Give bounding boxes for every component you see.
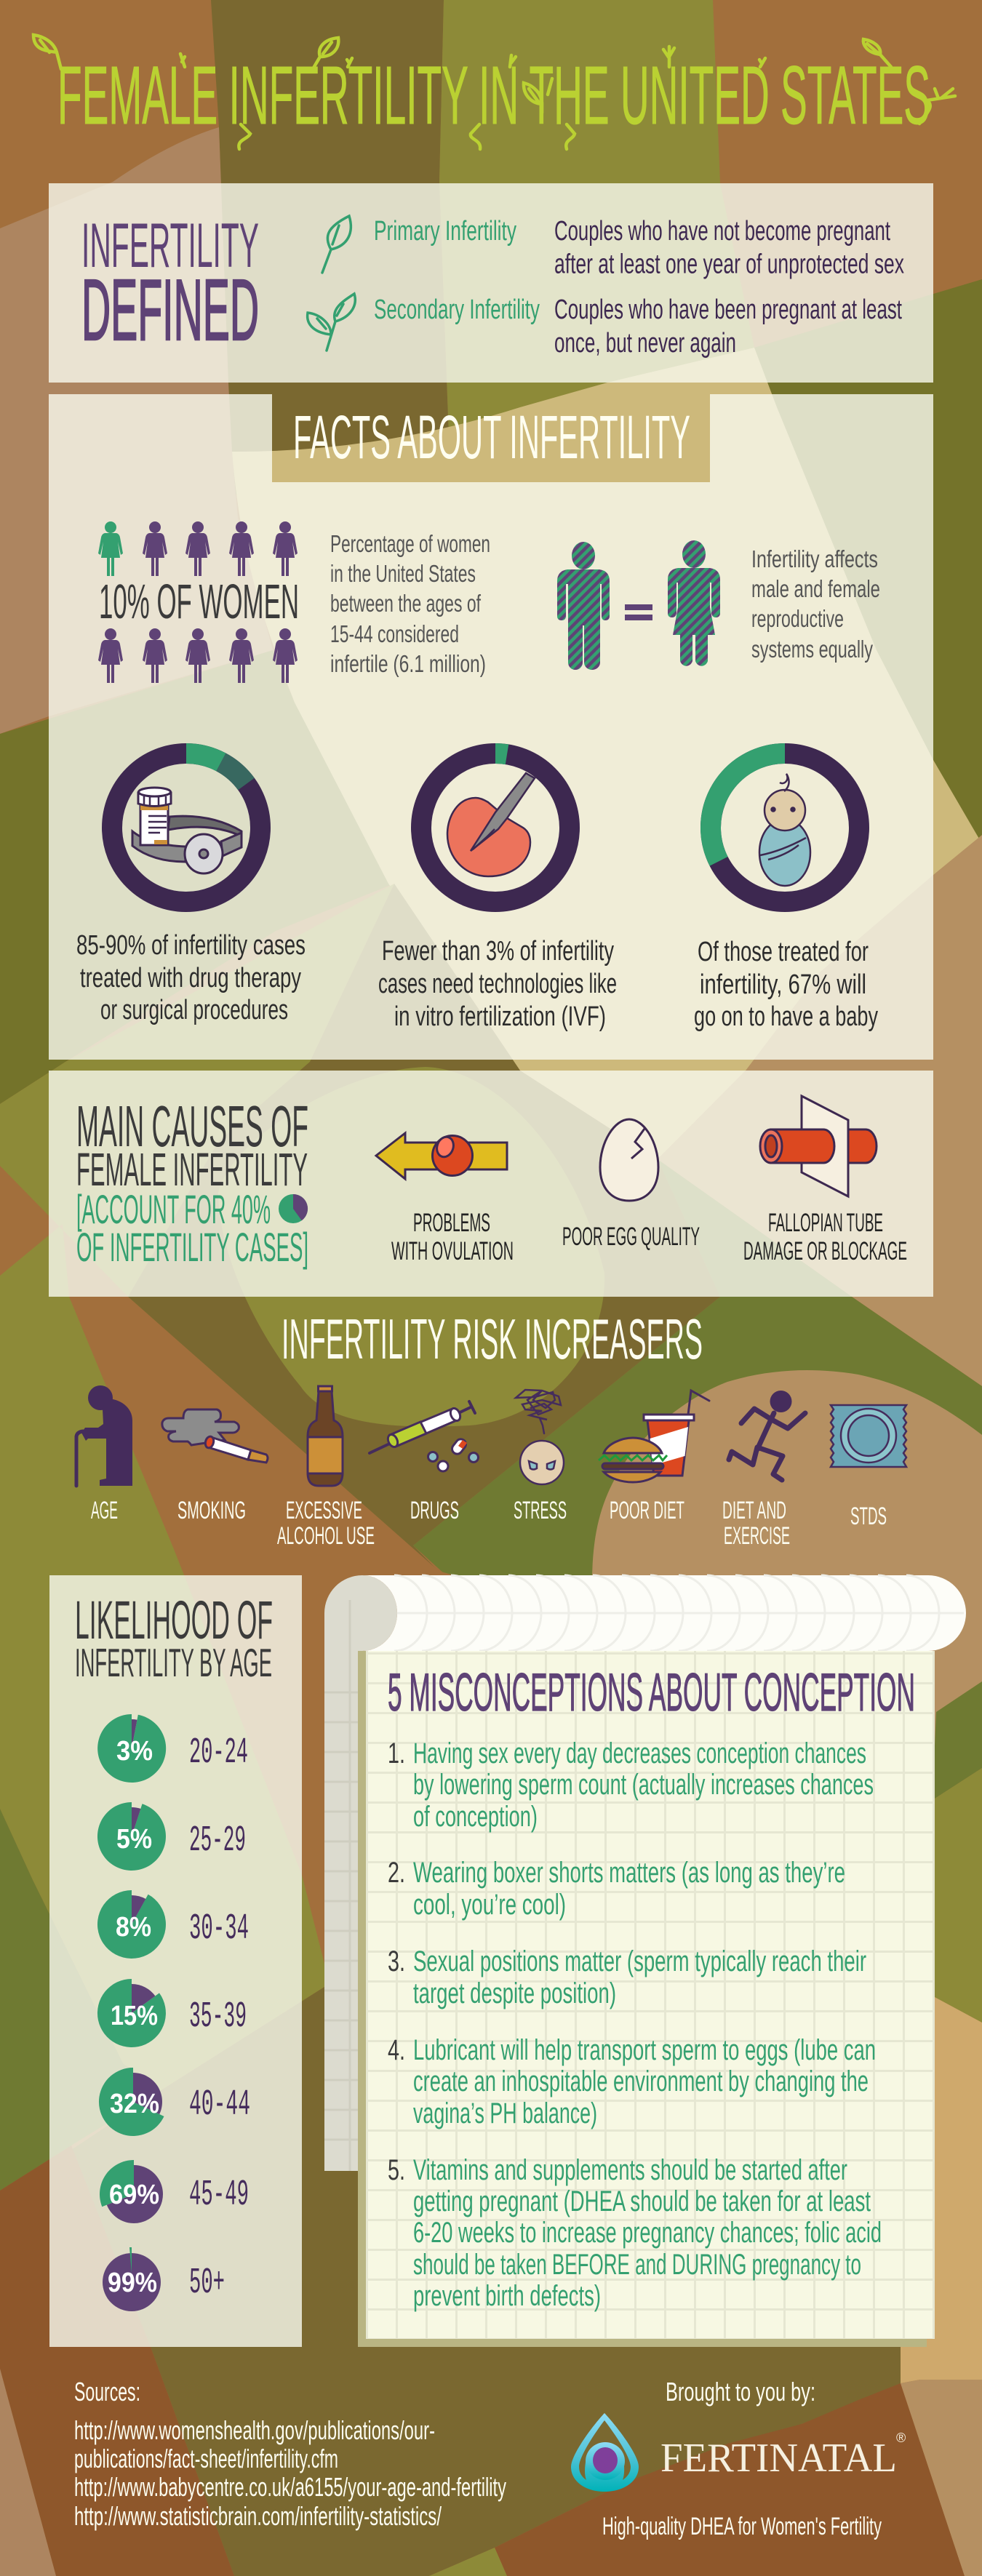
caption: have a baby: go on to have a baby: [694, 1001, 878, 1032]
panel: facts about infertility: [49, 394, 933, 1060]
text: percentage of women: 15-44 considered: [330, 620, 459, 647]
text: affects both sexes: Infertility affects: [751, 545, 878, 572]
icon: condom packet: [831, 1405, 906, 1467]
pie chart: 40 percent: [279, 1194, 308, 1223]
notepad page shadow: [358, 1651, 927, 2347]
icon: equals sign: [625, 604, 652, 620]
caption: drug therapy: or surgical procedures: [100, 995, 288, 1025]
label: diet and exercise: DIET AND: [722, 1497, 786, 1524]
icon: swaddled baby: [759, 774, 810, 886]
caption: have a baby: [694, 937, 878, 1032]
label: age 50+: 50+: [189, 2263, 225, 2304]
text: affects both sexes: systems equally: [751, 636, 873, 663]
list item 5: [388, 2154, 882, 2312]
label: excessive alcohol use: [277, 1497, 375, 1550]
label: stds: STDS: [850, 1503, 887, 1530]
icon: poor diet: [599, 1391, 709, 1482]
pie: 20-24: [97, 1714, 166, 1783]
panel: infertility defined: DEFINED: [81, 262, 259, 359]
label: problems with ovulation: WITH OVULATION: [391, 1237, 514, 1265]
sources: http://www.statisticbrain.com/infertility-statistics/: [74, 2501, 442, 2531]
list item 3: target despite position): [413, 1977, 616, 2009]
icon: egg and scalpel: [447, 773, 535, 876]
pie: 25-29: 5%: [116, 1824, 152, 1855]
list item 2: 2.: [388, 1857, 405, 1889]
list item 1: of conception): [413, 1801, 538, 1833]
donut chart: IVF: [421, 753, 570, 902]
list item 5: 5.: [388, 2154, 405, 2186]
label: excessive alcohol use: ALCOHOL USE: [277, 1522, 375, 1550]
text: affects both sexes: [751, 545, 880, 663]
label: poor egg quality: POOR EGG QUALITY: [562, 1223, 700, 1251]
pictogram: ten women: [98, 521, 298, 683]
caption: have a baby: infertility, 67% will: [700, 969, 866, 1000]
list item 4: vagina’s PH balance): [413, 2097, 597, 2129]
caption: drug therapy: [76, 930, 306, 1025]
pie: 45-49: 69%: [109, 2180, 159, 2210]
label: diet and exercise: EXERCISE: [724, 1522, 790, 1550]
icon: pill bottle and head mirror: [132, 788, 241, 873]
list item 2: [388, 1857, 845, 1921]
caption: drug therapy: 85-90% of infertility cases: [76, 930, 306, 961]
donut chart: drug therapy: [112, 753, 260, 902]
caption: IVF: in vitro fertilization (IVF): [394, 1001, 606, 1032]
list item 1: 1.: [388, 1737, 405, 1769]
notepad back sheet: [324, 1575, 397, 2171]
definition: secondary: once, but never again: [554, 328, 736, 359]
subheading: account for 40%: [ACCOUNT FOR 40%: [76, 1186, 271, 1232]
pie: 40-44: [99, 2068, 164, 2136]
panel: main causes: FEMALE INFERTILITY: [76, 1143, 308, 1196]
icon: single leaf: [322, 216, 351, 273]
label: primary infertility: Primary Infertility: [374, 216, 516, 247]
pie: 40-44: 32%: [110, 2089, 159, 2119]
label: age 45-49: 45-49: [189, 2175, 249, 2216]
label: poor diet: POOR DIET: [610, 1497, 684, 1524]
icon: cracked egg: [600, 1119, 658, 1201]
notepad page: [366, 1651, 935, 2339]
sources: http://www.babycentre.co.uk/a6155/your-age-and-fertility: [74, 2472, 506, 2502]
label: age 25-29: 25-29: [189, 1820, 246, 1862]
logo: fertinatal wordmark: ®: [896, 2431, 906, 2445]
panel: main causes: [49, 1071, 933, 1297]
definition: primary: [554, 216, 904, 279]
text: percentage of women: [330, 530, 490, 677]
list item 2: cool, you’re cool): [413, 1889, 566, 1921]
label: smoking: SMOKING: [177, 1497, 246, 1524]
pie: 30-34: 8%: [116, 1912, 151, 1943]
stat: 10% of women: 10% OF WOMEN: [99, 575, 299, 629]
label: age 20-24: 20-24: [189, 1732, 248, 1774]
notepad roll: [364, 1575, 966, 1651]
pie: 50+: 99%: [108, 2268, 157, 2298]
logo: fertinatal mark: [571, 2413, 639, 2492]
vines and leaves on the title: [33, 35, 955, 149]
label: excessive alcohol use: EXCESSIVE: [286, 1497, 362, 1524]
caption: drug therapy: treated with drug therapy: [80, 963, 301, 993]
panel: main causes: OF INFERTILITY CASES]: [76, 1224, 308, 1270]
label: drugs: DRUGS: [410, 1497, 459, 1524]
pie: 20-24: 3%: [116, 1736, 153, 1767]
label: age 40-44: 40-44: [189, 2084, 250, 2126]
caption: IVF: cases need technologies like: [378, 969, 617, 999]
panel: infertility defined: [49, 183, 933, 383]
sources: Sources:: [74, 2377, 140, 2407]
sources: http://www.womenshealth.gov/publications/our-: [74, 2415, 435, 2445]
pie: 35-39: 15%: [111, 2001, 158, 2031]
icon: male figure: [557, 542, 610, 670]
sources: publications/fact-sheet/infertility.cfm: [74, 2444, 338, 2473]
text: percentage of women: between the ages of: [330, 590, 482, 617]
text: affects both sexes: male and female: [751, 575, 880, 602]
pie: 35-39: [97, 1979, 166, 2047]
list item 3: 3.: [388, 1945, 405, 1977]
heading: main causes: [76, 1094, 308, 1196]
pie: 25-29: [97, 1802, 166, 1871]
icon: double leaf: [308, 294, 355, 351]
pie: 30-34: [97, 1890, 166, 1959]
caption: IVF: [378, 936, 617, 1032]
list item 5: prevent birth defects): [413, 2280, 601, 2312]
label: age: AGE: [91, 1497, 118, 1524]
label: fallopian tube damage: [743, 1209, 907, 1265]
text: percentage of women: Percentage of women: [330, 530, 490, 557]
icon: smoking: [162, 1409, 268, 1463]
icon: ovulation arrow: [376, 1133, 507, 1179]
label: secondary infertility: Secondary Infertility: [374, 295, 540, 325]
list item 4: 4.: [388, 2034, 405, 2066]
sources: [74, 2377, 506, 2531]
icon: stress: [516, 1390, 564, 1484]
logo: fertinatal wordmark: FERTINATAL: [660, 2436, 897, 2481]
list item 1: [388, 1737, 874, 1833]
label: diet and exercise: [722, 1497, 790, 1550]
subheading: account for 40%: [76, 1186, 308, 1270]
pie: 45-49: [100, 2160, 163, 2223]
icon: fallopian tube blockage: [760, 1096, 877, 1196]
label: age 30-34: 30-34: [189, 1908, 249, 1950]
label: fallopian tube damage: FALLOPIAN TUBE: [768, 1209, 883, 1237]
label: problems with ovulation: PROBLEMS: [413, 1209, 490, 1237]
list item 3: [388, 1945, 866, 2009]
brought to you by: Brought to you by:: [666, 2377, 815, 2407]
text: percentage of women: in the United States: [330, 560, 476, 587]
panel: notepad with misconceptions: [324, 1575, 966, 2347]
text: affects both sexes: reproductive: [751, 605, 844, 632]
label: stress: STRESS: [514, 1497, 567, 1524]
text: percentage of women: infertile (6.1 million): [330, 650, 486, 677]
panel: main causes: MAIN CAUSES OF: [76, 1094, 308, 1159]
label: age 35-39: 35-39: [189, 1996, 247, 2038]
caption: have a baby: Of those treated for: [698, 937, 869, 967]
definition: secondary: [554, 295, 902, 359]
pie: 50+: [103, 2247, 161, 2311]
icon: age: [76, 1385, 132, 1486]
panel: infertility defined: INFERTILITY: [81, 211, 259, 281]
heading: likelihood: [75, 1590, 273, 1685]
icon: runner: [729, 1391, 805, 1480]
caption: IVF: Fewer than 3% of infertility: [382, 936, 614, 967]
icon: drugs: [370, 1401, 479, 1471]
label: problems with ovulation: [391, 1209, 514, 1265]
panel: likelihood of infertility by age: INFERTILITY BY AGE: [75, 1640, 272, 1685]
list item 4: [388, 2034, 876, 2129]
section: infertility risk increasers: [76, 1307, 906, 1550]
panel: likelihood of infertility by age: LIKELIHOOD OF: [75, 1590, 273, 1650]
panel: likelihood of infertility by age: [49, 1575, 302, 2347]
icon: alcohol bottle: [308, 1386, 343, 1486]
icon: female figure: [668, 540, 720, 666]
donut chart: have a baby: [711, 753, 859, 902]
